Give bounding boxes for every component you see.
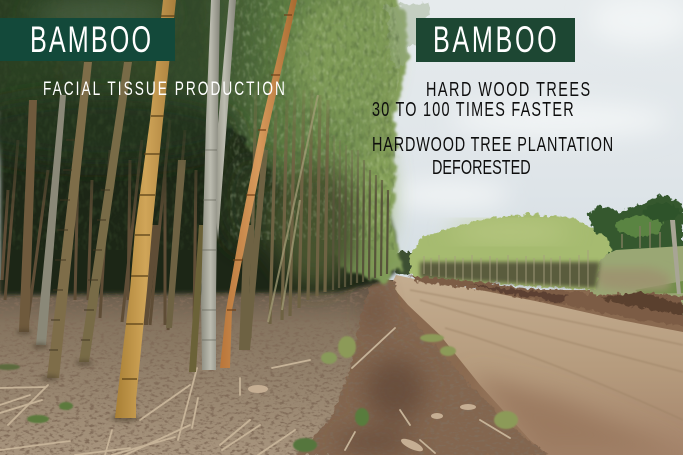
grass patches [0, 334, 518, 452]
distant hill trees [588, 194, 683, 262]
road bottom soft dirt fade [470, 375, 683, 455]
mid bamboo trunks [19, 0, 268, 378]
fallen debris on floor [0, 328, 510, 455]
right dirt ridge [408, 276, 683, 326]
far bamboo clump [396, 214, 612, 290]
fence post [670, 220, 681, 294]
left banner title: BAMBOO [30, 18, 151, 60]
road [391, 275, 683, 455]
hill grass [590, 246, 683, 322]
left forest floor [0, 280, 400, 455]
mulch ridge [290, 275, 550, 455]
grey bamboo trunk [201, 0, 220, 370]
sky [0, 0, 683, 290]
foliage texture [0, 0, 400, 250]
left caption: FACIAL TISSUE PRODUCTION [43, 78, 285, 100]
line: hard wood trees: HARD WOOD TREES [426, 78, 590, 101]
orange bamboo trunk [220, 0, 297, 368]
line: deforested: DEFORESTED [432, 156, 531, 179]
hill trunks [622, 222, 660, 248]
dark forest interior [0, 60, 396, 295]
right banner title: BAMBOO [433, 18, 557, 60]
right text block [372, 78, 613, 179]
right banner [416, 18, 575, 62]
back rows of bamboo stems [2, 90, 388, 338]
line: times faster: 30 TO 100 TIMES FASTER [372, 98, 574, 121]
trunk bases shadow [16, 329, 139, 422]
foliage canopy [0, 0, 430, 287]
line: plantation: HARDWOOD TREE PLANTATION [372, 133, 613, 156]
left banner [0, 18, 175, 61]
yellow bamboo trunk [115, 0, 176, 418]
